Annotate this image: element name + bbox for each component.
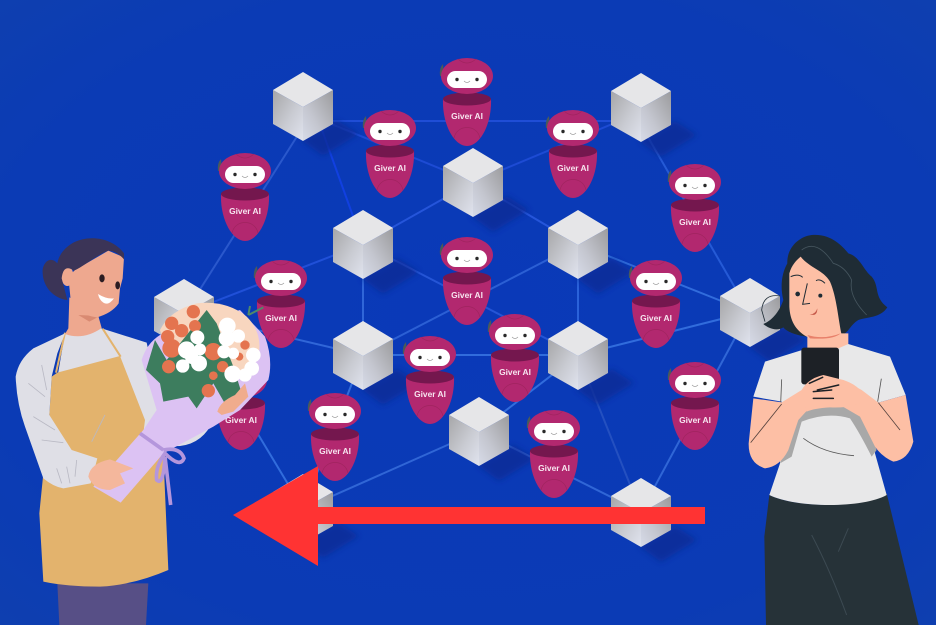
cube lower right <box>548 321 634 405</box>
robot 7 <box>254 260 307 348</box>
robot 8 <box>629 260 682 348</box>
eyes <box>99 274 105 282</box>
neck <box>65 297 102 336</box>
robot 2 <box>363 110 416 198</box>
robot 3 <box>546 110 599 198</box>
robot 5 <box>668 164 721 252</box>
robot 5: Giver AI <box>679 217 711 227</box>
skirt folds <box>812 528 848 615</box>
leaves <box>146 310 241 408</box>
neck shadow <box>807 333 841 339</box>
near sleeve <box>16 333 97 488</box>
Giver AI robots <box>214 58 721 498</box>
robot 11 <box>214 362 267 450</box>
shirt creases <box>781 379 881 456</box>
hands <box>802 375 863 412</box>
skirt <box>764 493 919 625</box>
right arm <box>840 380 913 462</box>
cube top centre <box>443 148 529 232</box>
robot 9: Giver AI <box>499 367 531 377</box>
robot 12: Giver AI <box>319 446 351 456</box>
robot 12 <box>308 393 361 481</box>
network connection lines <box>185 112 749 512</box>
eucalyptus sprig <box>248 306 263 315</box>
robot 13 <box>668 362 721 450</box>
fingers <box>809 377 839 398</box>
robot 10 <box>403 336 456 424</box>
robot 9 <box>488 314 541 402</box>
robot 6: Giver AI <box>451 290 483 300</box>
sweater folds <box>28 365 105 483</box>
face <box>789 257 842 338</box>
robot 14: Giver AI <box>538 463 570 473</box>
robot 8: Giver AI <box>640 313 672 323</box>
robot 1: Giver AI <box>451 111 483 121</box>
florist holding a bouquet <box>16 238 270 625</box>
robot 10: Giver AI <box>414 389 446 399</box>
robot 6 <box>440 237 493 325</box>
bouquet peach backing <box>160 303 259 380</box>
robot 1 <box>440 58 493 146</box>
robot 13: Giver AI <box>679 415 711 425</box>
holding hand <box>88 459 133 490</box>
hair <box>763 235 887 337</box>
red arrow pointing left <box>233 466 705 566</box>
robot 3: Giver AI <box>557 163 589 173</box>
cube bottom right <box>611 478 697 562</box>
trousers <box>57 583 148 625</box>
robot 4: Giver AI <box>229 206 261 216</box>
customer using a phone <box>749 235 919 625</box>
bouquet stems <box>217 378 238 407</box>
eyes and nose <box>791 275 825 304</box>
left arm <box>749 390 817 468</box>
cube far right <box>720 278 806 362</box>
cube lower centre <box>449 397 535 481</box>
robot 7: Giver AI <box>265 313 297 323</box>
neck <box>807 333 848 353</box>
cube far left <box>154 279 240 363</box>
cube middle right <box>548 210 634 294</box>
cube top right <box>611 73 697 157</box>
cube lower left <box>333 321 419 405</box>
robot 11: Giver AI <box>225 415 257 425</box>
hair strands <box>802 246 867 315</box>
ribbon <box>140 433 184 505</box>
shirt shadow <box>780 405 877 463</box>
cube middle left <box>333 210 419 294</box>
bouquet wrap <box>93 310 270 503</box>
orange flowers <box>161 305 250 397</box>
cube top left <box>273 72 359 156</box>
face <box>68 251 124 317</box>
ear <box>61 266 73 286</box>
robot 2: Giver AI <box>374 163 406 173</box>
arm lines <box>751 403 900 443</box>
t-shirt <box>753 344 906 505</box>
apron straps <box>56 329 121 373</box>
cube bottom left <box>273 474 359 558</box>
cube nodes <box>154 72 806 562</box>
hair <box>43 238 124 300</box>
white flowers <box>176 318 261 382</box>
mouth <box>809 308 817 315</box>
apron <box>39 356 168 587</box>
robot 14 <box>527 410 580 498</box>
phone <box>801 348 839 384</box>
smile <box>98 294 114 304</box>
bouquet hand <box>217 383 248 415</box>
robot 4 <box>218 153 271 241</box>
neck shadow <box>78 315 100 322</box>
sweater body and far sleeve <box>50 328 213 460</box>
